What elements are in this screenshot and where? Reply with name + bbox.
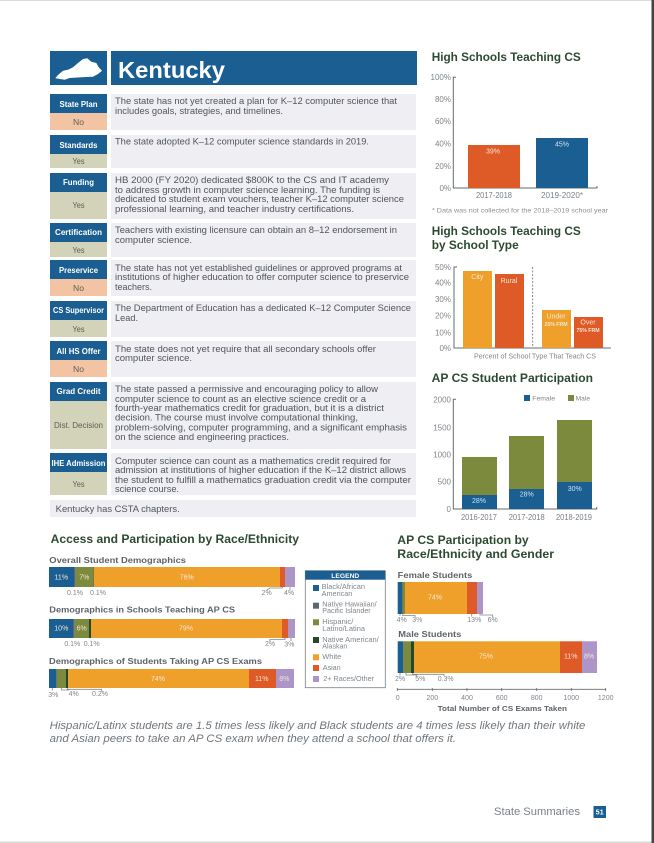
bar: Female Students: 13% (467, 617, 481, 624)
x axis: total number of CS exams: 600 (496, 695, 508, 702)
policy row: Standards: The state adopted K–12 computer science standards in 2019. (115, 136, 369, 146)
legend: Alaskan (322, 642, 347, 650)
chart: High Schools Teaching CS: 100% (431, 73, 451, 82)
policy row: Certification: Yes (72, 246, 84, 255)
chart: High Schools Teaching CS: 80% (435, 95, 451, 104)
chart: AP CS Student Participation (432, 371, 597, 522)
bar: Demographics in Schools Teaching AP CS: 0.1% (84, 641, 100, 648)
bar: Overall Student Demographics: 0.1% (67, 590, 83, 597)
chart: AP CS Student Participation: 28% (472, 498, 486, 505)
bar: Female Students: 6% (488, 617, 498, 624)
bar: Demographics in Schools Teaching AP CS: 10% (54, 626, 68, 632)
chart: High Schools Teaching CS: 20% (435, 162, 451, 171)
policy row: CS Supervisor (50, 301, 416, 337)
policy row: Grad Credit: Grad Credit (56, 387, 101, 396)
policy row: All HS Offer: All HS Offer (56, 347, 100, 356)
bar: Demographics in Schools Teaching AP CS: 0.1% (64, 641, 80, 648)
policy row: CS Supervisor: Yes (72, 325, 84, 334)
bar: Female Students: 4% (397, 617, 407, 624)
policy row: State Plan: No (73, 118, 85, 127)
policy row: Funding (50, 173, 416, 219)
policy row: Preservice: teachers. (115, 281, 152, 292)
bar: Male Students: 8% (584, 654, 594, 660)
callout: italic takeaway (50, 720, 585, 745)
policy row: Grad Credit: problem-solving, computer programming, and a significant emphasis (115, 422, 407, 433)
chart: High Schools Teaching CS: High Schools Teaching CS (432, 50, 581, 64)
policy row: Certification: Certification (55, 228, 102, 237)
chart: High Schools Teaching CS (431, 50, 609, 214)
legend: Pacific Islander (322, 606, 371, 615)
chart: High Schools Teaching CS: 40% (435, 140, 451, 148)
chart: High Schools Teaching CS by School Type: Percent of School Type That Teach CS (474, 354, 596, 360)
chart: High Schools Teaching CS by School Type: Rural (501, 278, 518, 285)
chart: High Schools Teaching CS by School Type: 0% (439, 344, 451, 353)
x axis: total number of CS exams (396, 688, 614, 713)
policy row: All HS Offer: No (73, 365, 85, 374)
bar: Male Students: 0.3% (438, 676, 454, 683)
policy row: Funding: Yes (72, 201, 84, 210)
policy row: Certification: computer science. (115, 234, 192, 245)
bar: Demographics of Students Taking AP CS Exams: 74% (151, 676, 165, 683)
bar: Overall Student Demographics: 4% (284, 590, 294, 597)
bar: Male Students: Male Students (398, 629, 462, 639)
chart: High Schools Teaching CS by School Type: 40% (435, 279, 451, 288)
chart: AP CS Student Participation: 2018-2019 (556, 513, 593, 522)
policy row: Preservice: No (73, 284, 85, 293)
policy row: IHE Admission: the student to fulfill a mathematics graduation credit via the computer (115, 474, 411, 485)
legend: Native Hawaiian/ (322, 600, 377, 608)
policy row: Grad Credit: Dist. Decision (54, 421, 103, 430)
chart: Access and Participation by Race/Ethnicity: Access and Participation by Race/Ethnicity (51, 532, 299, 546)
policy row: IHE Admission: science course. (115, 483, 179, 494)
policy row: Funding: HB 2000 (FY 2020) dedicated $800K to the CS and IT academy (115, 174, 389, 185)
bar: Demographics in Schools Teaching AP CS: 79% (179, 626, 193, 632)
x axis: total number of CS exams: 200 (426, 695, 438, 702)
legend: American (322, 589, 352, 598)
chart: High Schools Teaching CS by School Type (432, 224, 611, 360)
policy row: Standards: Standards (60, 141, 98, 150)
bar: Demographics of Students Taking AP CS Exams: 3% (48, 692, 58, 699)
chart: AP CS Student Participation: 1000 (433, 451, 452, 460)
chart: AP CS Student Participation: 2017-2018 (509, 513, 545, 522)
bar: Female Students: Female Students (398, 570, 473, 580)
chart: High Schools Teaching CS: 2019-2020* (541, 191, 583, 200)
chart: High Schools Teaching CS: 2017-2018 (476, 191, 513, 200)
policy row: Preservice (50, 260, 416, 296)
chart: High Schools Teaching CS: 0% (439, 184, 451, 193)
bar: Overall Student Demographics: 76% (180, 574, 194, 582)
chart: High Schools Teaching CS by School Type: 75% FRM (576, 328, 600, 334)
policy row: IHE Admission: Yes (72, 480, 84, 489)
CSTA chapters note: Kentucky has CSTA chapters. (56, 503, 180, 514)
bar: Demographics of Students Taking AP CS Exams: 11% (255, 676, 268, 683)
legend: Hispanic/ (322, 617, 353, 626)
bar: Demographics of Students Taking AP CS Exams: 8% (279, 676, 289, 683)
bar: Male Students: 11% (564, 654, 577, 660)
chart: High Schools Teaching CS by School Type: High Schools Teaching CS (432, 224, 581, 238)
bar: Demographics in Schools Teaching AP CS: 6% (77, 626, 87, 632)
legend: White (322, 652, 341, 661)
chart: High Schools Teaching CS: 45% (555, 142, 569, 148)
bar: Overall Student Demographics (49, 555, 295, 597)
bar: Demographics of Students Taking AP CS Exams: Demographics of Students Taking AP CS Exams (49, 656, 262, 666)
bar: Demographics in Schools Teaching AP CS (49, 605, 295, 648)
policy row: Certification (50, 223, 416, 257)
chart: AP CS Student Participation: 2016-2017 (461, 513, 498, 522)
bar: Male Students: 75% (479, 654, 493, 660)
bar: Male Students: 2% (395, 676, 405, 683)
chart: High Schools Teaching CS: * Data was not collected for the 2018–2019 school year (432, 208, 609, 214)
bar: Female Students: 74% (428, 594, 442, 602)
bar: Overall Student Demographics: Overall Student Demographics (49, 555, 186, 565)
legend: 2+ Races/Other (323, 674, 375, 683)
chart: High Schools Teaching CS by School Type: 20% (435, 312, 451, 321)
header: Kentucky (50, 51, 417, 85)
footer: page label and number: 51 (596, 810, 604, 816)
policy row: Grad Credit: computer science to count as an elective science credit or a (115, 393, 367, 404)
x axis: total number of CS exams: 400 (461, 695, 473, 702)
bar: Demographics of Students Taking AP CS Exams: 4% (69, 691, 79, 698)
policy row: Preservice: institutions of higher education to offer computer science to preservice (115, 271, 409, 282)
legend: Latino/Latina (322, 624, 365, 633)
policy row: All HS Offer (50, 341, 416, 377)
policy row: Grad Credit (50, 382, 416, 449)
legend: Black/African (322, 582, 365, 591)
bar: Male Students: 5% (415, 676, 425, 683)
chart: High Schools Teaching CS by School Type: Over (580, 320, 596, 326)
bar: Demographics of Students Taking AP CS Exams (48, 656, 294, 699)
legend: Asian (323, 663, 341, 672)
policy row: Grad Credit: fourth-year mathematics credit for graduation, but it is a district (115, 402, 384, 413)
policy row: Standards: Yes (72, 157, 84, 166)
bar: Demographics in Schools Teaching AP CS: Demographics in Schools Teaching AP CS (49, 605, 235, 615)
policy row: Grad Credit: on the science and engineering practices. (115, 431, 289, 442)
policy row: IHE Admission: admission at institutions of higher education if the K–12 district allows (115, 464, 406, 475)
bar: Overall Student Demographics: 7% (79, 574, 89, 582)
callout: italic takeaway: Hispanic/Latinx students are 1.5 times less likely and Black students are 4 times less likely than their white (50, 720, 585, 732)
policy row: Funding: dedicated to student exam vouchers, teacher K–12 computer science (115, 193, 404, 204)
policy row: All HS Offer: The state does not yet require that all secondary schools offer (115, 343, 376, 354)
x axis: total number of CS exams: 1200 (598, 695, 614, 702)
chart: AP CS Participation by Race/Ethnicity and Gender (395, 533, 614, 713)
x axis: total number of CS exams: 0 (396, 695, 400, 702)
footer: page label and number: State Summaries (494, 806, 580, 818)
bar: Demographics in Schools Teaching AP CS: 3% (284, 642, 294, 648)
policy row: Funding: professional learning, and teacher industry certifications. (115, 203, 354, 214)
policy row: Grad Credit: The state passed a permissive and encouraging policy to allow (115, 383, 378, 394)
chart: AP CS Student Participation: Male (576, 395, 590, 402)
bar: Female Students: 3% (412, 617, 422, 624)
chart: High Schools Teaching CS by School Type: 10% (435, 328, 451, 337)
policy row: State Plan: The state has not yet created a plan for K–12 computer science that (115, 95, 397, 106)
policy row: Funding: to address growth in computer science learning. The funding is (115, 184, 380, 195)
icon: Kentucky state shape (55, 58, 102, 80)
policy row: All HS Offer: computer science. (115, 352, 192, 363)
policy row: IHE Admission: Computer science can count as a mathematics credit required for (115, 455, 391, 466)
bar: Female Students (397, 570, 498, 624)
bar: Male Students (395, 629, 597, 683)
chart: AP CS Student Participation: Female (532, 395, 555, 402)
policy row: IHE Admission (50, 453, 416, 495)
chart: AP CS Student Participation: 1500 (433, 423, 452, 432)
chart: High Schools Teaching CS by School Type: City (471, 274, 484, 281)
chart: High Schools Teaching CS by School Type: 50% (435, 263, 451, 272)
chart: AP CS Student Participation: 500 (438, 478, 452, 487)
policy row: Grad Credit: decision. The course must involve computational thinking, (115, 412, 358, 423)
policy row: CS Supervisor: The Department of Education has a dedicated K–12 Computer Science (115, 302, 411, 313)
chart: High Schools Teaching CS by School Type: 25% FRM (544, 322, 568, 328)
bar: Overall Student Demographics: 11% (55, 574, 68, 582)
policy row: Certification: Teachers with existing licensure can obtain an 8–12 endorsement in (115, 224, 397, 235)
chart: AP CS Participation by Race/Ethnicity and Gender: Race/Ethnicity and Gender (397, 547, 554, 561)
chart: AP CS Student Participation: 28% (520, 492, 534, 498)
x axis: total number of CS exams: Total Number of CS Exams Taken (438, 704, 567, 713)
legend (305, 571, 385, 688)
chart: High Schools Teaching CS by School Type: Under (546, 314, 566, 320)
header: Kentucky: Kentucky (118, 57, 225, 83)
chart: High Schools Teaching CS: 39% (486, 148, 500, 156)
policy row: IHE Admission: IHE Admission (52, 459, 106, 468)
policy row: State Plan: State Plan (60, 100, 98, 109)
bar: Demographics in Schools Teaching AP CS: 2% (265, 641, 275, 648)
policy row: CS Supervisor: CS Supervisor (53, 306, 104, 315)
policy row: Preservice: The state has not yet established guidelines or approved programs at (115, 262, 402, 273)
legend: Native American/ (322, 635, 379, 644)
chart: AP CS Participation by Race/Ethnicity and Gender: AP CS Participation by (397, 533, 529, 547)
bar: Overall Student Demographics: 2% (262, 590, 272, 597)
chart: Access and Participation by Race/Ethnicity (48, 532, 299, 699)
CSTA chapters note (50, 500, 416, 517)
policy row: State Plan (50, 94, 416, 130)
chart: AP CS Student Participation: 30% (568, 486, 582, 493)
chart: AP CS Student Participation: AP CS Student Participation (432, 371, 593, 385)
chart: High Schools Teaching CS by School Type: by School Type (432, 238, 519, 252)
policy row: State Plan: includes goals, strategies, and timelines. (115, 105, 283, 116)
chart: AP CS Student Participation: 0 (447, 505, 452, 514)
chart: AP CS Student Participation: 2000 (433, 395, 452, 404)
legend: LEGEND (331, 573, 360, 580)
policy row: Preservice: Preservice (59, 266, 99, 275)
policy row: Standards (50, 135, 416, 168)
x axis: total number of CS exams: 800 (531, 695, 543, 702)
x axis: total number of CS exams: 1000 (564, 695, 579, 702)
chart: High Schools Teaching CS: 60% (435, 117, 451, 126)
bar: Overall Student Demographics: 0.1% (90, 590, 106, 597)
policy row: Funding: Funding (63, 178, 94, 187)
bar: Demographics of Students Taking AP CS Exams: 0.2% (92, 691, 108, 698)
policy row: CS Supervisor: Lead. (115, 312, 138, 323)
callout: italic takeaway: and Asian peers to take an AP CS exam when they attend a school that offers it. (50, 733, 456, 745)
chart: High Schools Teaching CS by School Type: 30% (435, 295, 451, 304)
